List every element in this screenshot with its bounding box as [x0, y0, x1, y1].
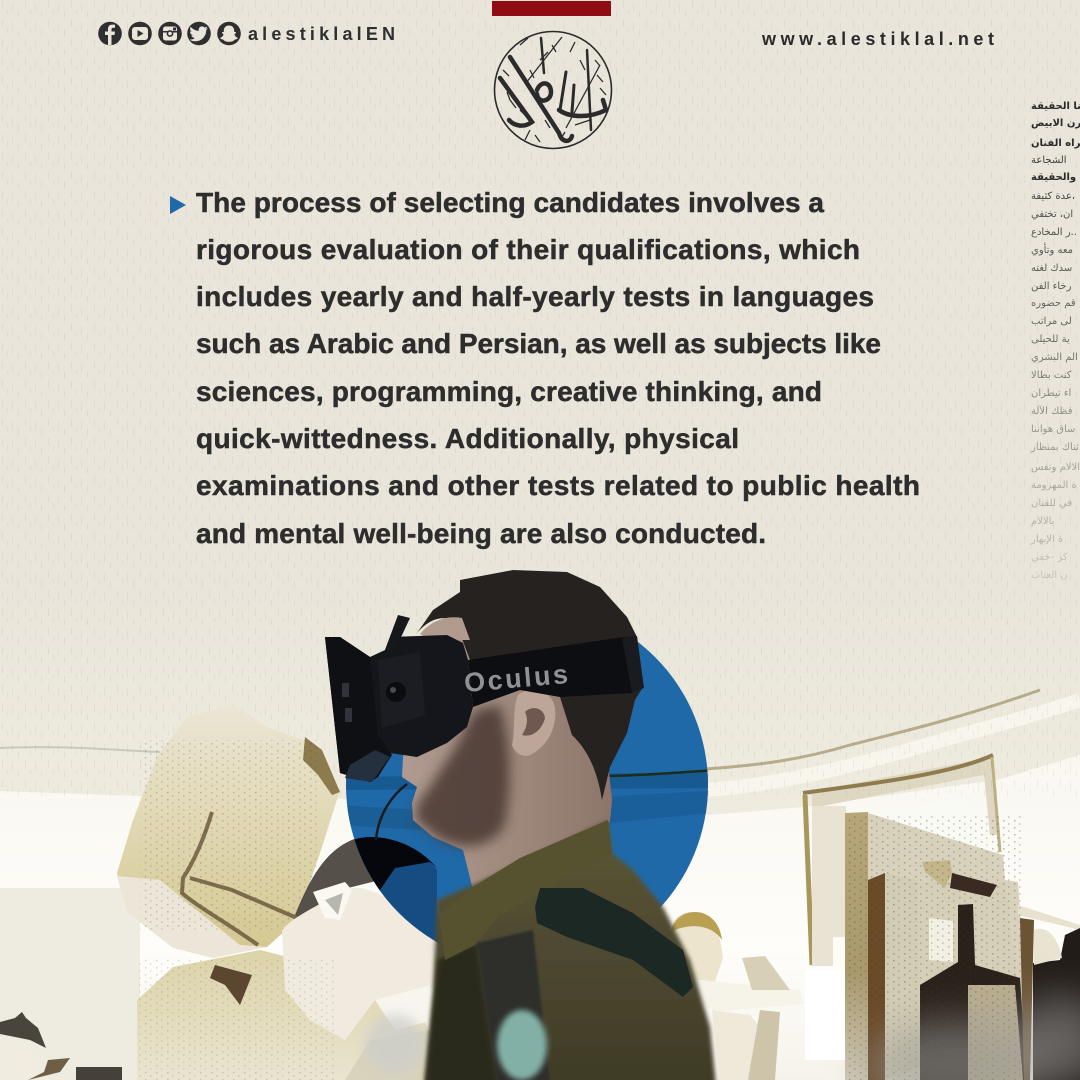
newspaper column: الالام ونفس	[1031, 462, 1080, 473]
background office scene	[0, 600, 1080, 1080]
dark left side of uniform	[426, 943, 497, 1080]
background soldier standing	[117, 705, 340, 958]
website address: www.alestiklal.net	[761, 29, 994, 49]
newspaper column: رخاء الفن	[1031, 281, 1072, 292]
monitor	[845, 812, 1080, 1080]
shoulder loop	[477, 930, 550, 1080]
newspaper column: الم البشري	[1031, 352, 1078, 363]
strap logo: Oculus	[463, 659, 569, 698]
blue circle	[346, 642, 708, 943]
ear	[512, 690, 555, 756]
desk object bottom left	[0, 1012, 122, 1080]
newspaper column: الشجاعة	[1031, 155, 1067, 166]
newspaper column: فظك الآلة	[1031, 405, 1073, 417]
badge	[497, 1010, 547, 1080]
main paragraph: rigorous evaluation of their qualifications, which	[196, 234, 860, 265]
cable	[376, 784, 407, 840]
background soldier seated	[137, 835, 440, 1080]
door frame	[803, 755, 1000, 967]
newspaper column: في للفنان	[1031, 498, 1072, 509]
newspaper column: كر -خفي	[1031, 552, 1068, 563]
newspaper column: قم حضوره	[1031, 298, 1076, 309]
icon: youtube	[128, 22, 152, 45]
paper texture	[0, 0, 1080, 800]
newspaper column: ن العتاب	[1031, 570, 1068, 581]
newspaper column: نا الحقيقة	[1031, 101, 1080, 112]
newspaper column: لى مراتب	[1031, 316, 1072, 327]
newspaper column: اء تيطران	[1031, 388, 1071, 399]
neck and face	[402, 625, 612, 890]
newspaper column: عدة كثيفة،	[1031, 191, 1075, 202]
shoulder strap pad	[535, 888, 693, 997]
red top bar	[492, 1, 611, 16]
forehead highlight	[420, 617, 470, 640]
background man and table	[671, 912, 845, 1080]
icon: snapchat	[217, 22, 241, 45]
icon: facebook	[98, 22, 122, 45]
newspaper column: رن الابيض	[1031, 118, 1080, 129]
newspaper column: كنت بطالا	[1031, 370, 1072, 381]
main paragraph: such as Arabic and Persian, as well as subjects like	[196, 328, 881, 359]
hair	[417, 570, 643, 800]
main paragraph: examinations and other tests related to public health	[196, 470, 920, 501]
newspaper column: ة المهزومة	[1031, 480, 1077, 491]
dark hair outside circle	[295, 835, 380, 925]
main paragraph	[196, 187, 920, 549]
newspaper column: ان، تختفي	[1031, 209, 1073, 220]
newspaper column: سدك لغته	[1031, 263, 1072, 274]
social icons row	[98, 22, 241, 45]
uniform body	[423, 820, 717, 1080]
foreground soldier with VR headset	[325, 570, 717, 1080]
newspaper column: بالالام	[1031, 516, 1054, 527]
circular calligraphy logo	[494, 32, 612, 148]
newspaper column: ة الإبهار	[1030, 534, 1063, 545]
social handle: alestiklalEN	[248, 24, 395, 44]
main paragraph: The process of selecting candidates involves a	[196, 187, 824, 218]
newspaper column: ساق هواننا	[1031, 424, 1075, 435]
sleeve and arm	[117, 876, 267, 958]
shirt collar	[439, 820, 612, 960]
hand on headset	[282, 888, 440, 1040]
head strap	[468, 637, 643, 707]
newspaper column: ثناك بمنظار	[1030, 442, 1079, 453]
grey cabinet	[0, 888, 140, 1080]
newspaper column	[1030, 101, 1080, 581]
headset	[325, 615, 644, 782]
main paragraph: sciences, programming, creative thinking, and	[196, 376, 822, 407]
main paragraph: includes yearly and half-yearly tests in languages	[196, 281, 874, 312]
bullet triangle	[170, 196, 186, 214]
main paragraph: quick-wittedness. Additionally, physical	[196, 423, 739, 454]
newspaper column: ية للحيلى	[1031, 334, 1070, 345]
icon: twitter	[187, 22, 211, 45]
visor body	[325, 635, 473, 782]
main paragraph: and mental well-being are also conducted.	[196, 518, 766, 549]
icon: instagram	[158, 22, 182, 45]
beard	[416, 705, 510, 846]
newspaper column: ر المخادع..	[1031, 227, 1077, 238]
seated soldier head inside circle	[354, 837, 438, 942]
newspaper column: معه وتأوي	[1031, 242, 1073, 256]
